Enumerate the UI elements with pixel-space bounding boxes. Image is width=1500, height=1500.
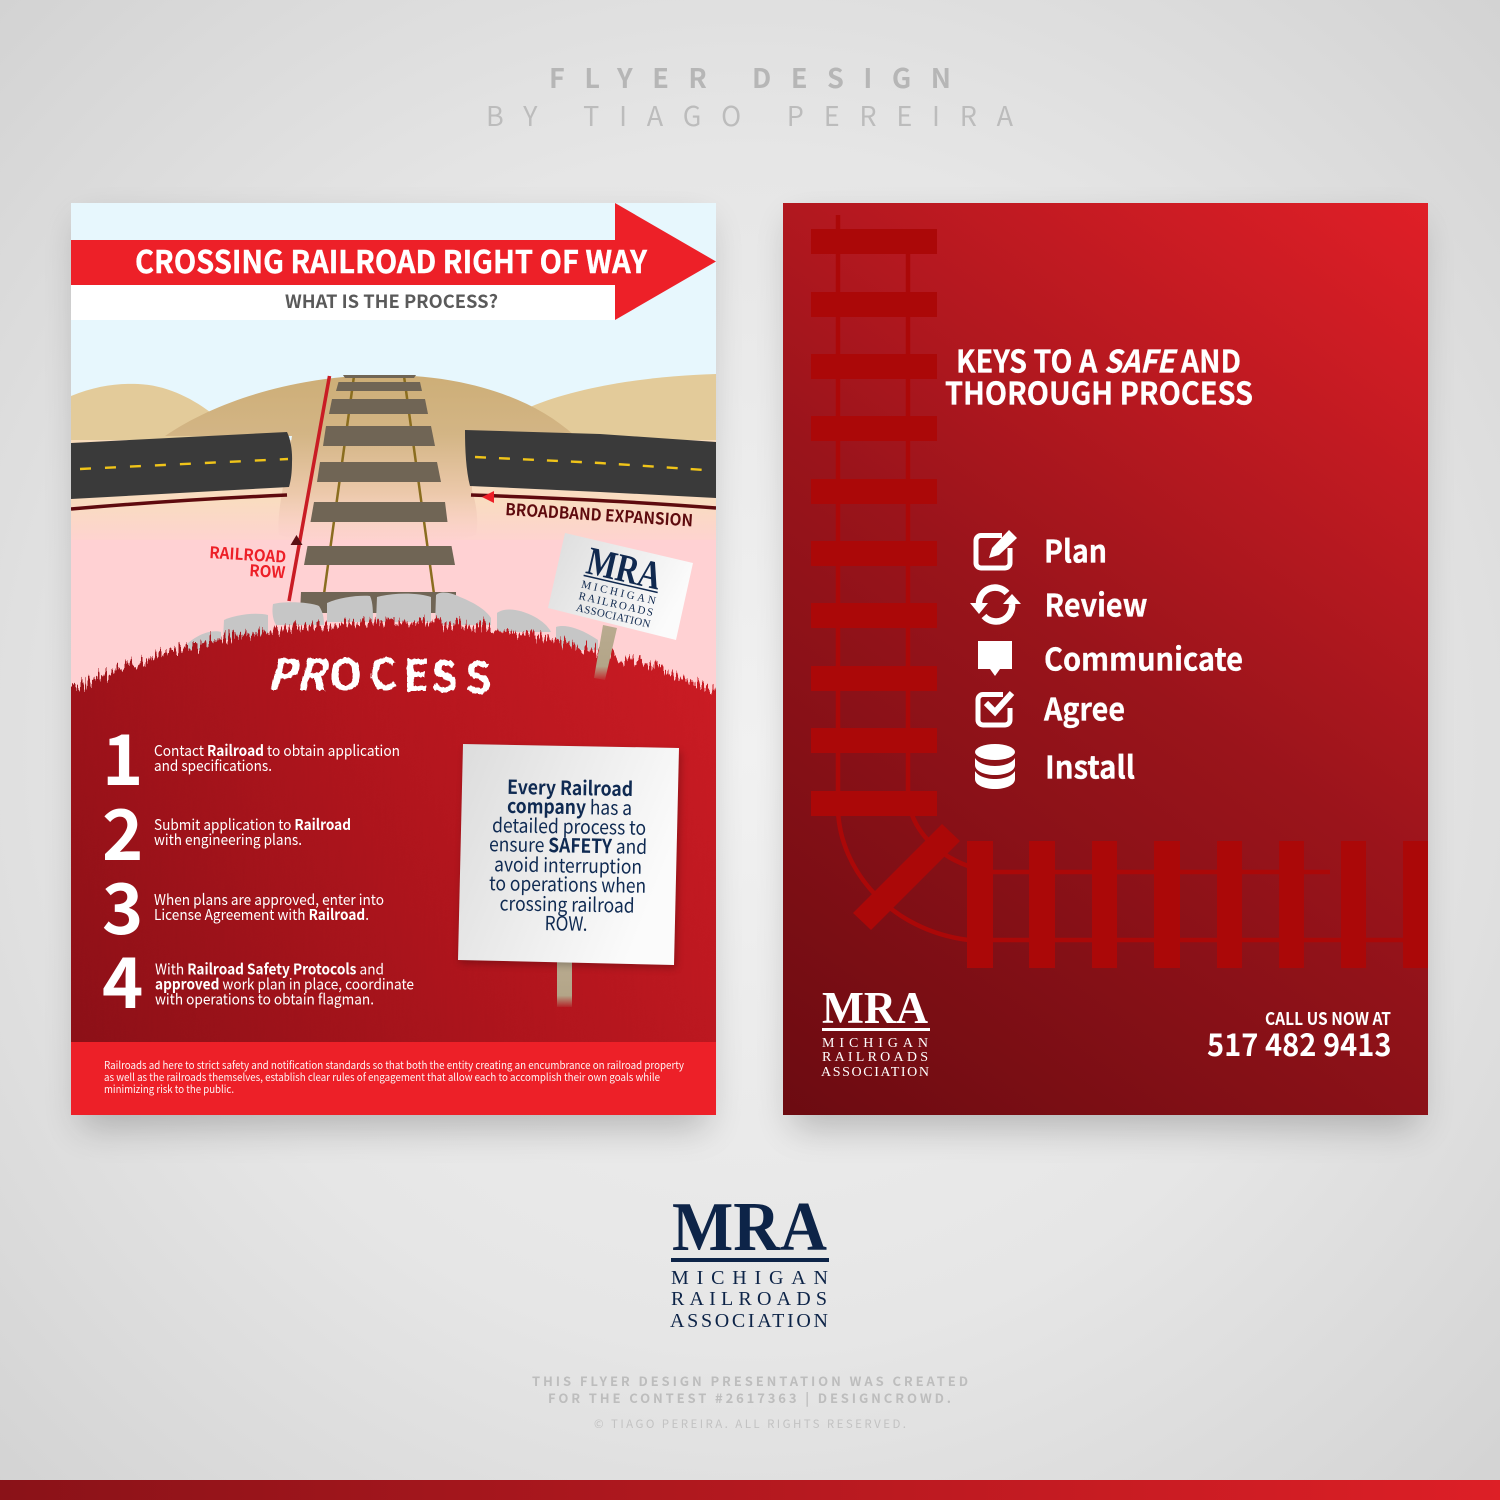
sky (71, 203, 716, 440)
step 1 (108, 734, 399, 785)
list item: agree: Agree (1043, 684, 1125, 730)
grassy red hill (71, 614, 716, 1042)
step 4 (103, 958, 414, 1008)
heading: process: S (465, 644, 492, 706)
step 3: 3 (102, 854, 143, 955)
sign text: ROW. (544, 907, 588, 937)
sign logo: RAILROADS (577, 590, 654, 619)
call to action: 517 482 9413 (1207, 1020, 1392, 1065)
list item: install (975, 742, 1135, 789)
footer strip with disclaimer: Railroads ad here to strict safety and notification standards so that both the entity creating an encumbrance on railroad property (104, 1058, 684, 1073)
list item: review: Review (1044, 580, 1148, 626)
step 3: License Agreement with Railroad. (154, 904, 369, 925)
heading: process: S (431, 643, 458, 705)
label: broadband expansion: BROADBAND EXPANSION (505, 496, 694, 531)
logo: MRA white: MICHIGAN (822, 1036, 928, 1051)
footer credit text: THIS FLYER DESIGN PRESENTATION WAS CREATED (532, 1371, 968, 1390)
middle hill and track bed (166, 376, 572, 515)
sign: MRA roadside (548, 533, 693, 680)
heading: flyer design by Tiago Pereira (486, 57, 1014, 134)
railway track (300, 375, 456, 613)
sign text: avoid interruption (494, 848, 642, 880)
sign text: Every Railroad (507, 771, 633, 802)
sign post (594, 625, 617, 680)
step 4: with operations to obtain flagman. (155, 988, 374, 1010)
sign logo (576, 548, 658, 628)
sign post (557, 961, 572, 1007)
step 4: approved work plan in place, coordinate (155, 974, 414, 994)
title: CROSSING RAILROAD RIGHT OF WAY (135, 237, 648, 282)
footer credit text: FOR THE CONTEST #2617363 | DESIGNCROWD. (548, 1388, 951, 1407)
red arrow (71, 203, 716, 320)
icon: pencil and square (976, 530, 1017, 568)
icon: refresh arrows (970, 588, 1021, 621)
arrow: railroad row (290, 535, 302, 545)
heading: process: C (369, 641, 397, 703)
panel: left flyer (40, 203, 750, 1115)
back hills (71, 374, 716, 440)
footer strip with disclaimer: minimizing risk to the public. (104, 1082, 234, 1097)
sign board (548, 533, 693, 640)
heading: process: O (329, 641, 362, 703)
step 2: Submit application to Railroad (154, 814, 351, 835)
heading: flyer design by Tiago Pereira: FLYER DESIGN (549, 57, 951, 96)
broadband lines (71, 495, 716, 509)
subtitle band (71, 285, 615, 320)
title banner arrow (71, 203, 716, 320)
bottom bar (0, 1480, 1500, 1500)
icon: speech bubble (978, 641, 1012, 676)
heading: process: R (296, 641, 331, 703)
icon: database (975, 744, 1015, 789)
list item: plan: Plan (1044, 526, 1107, 572)
logo: Michigan Railroads Association: MRA (672, 1189, 827, 1266)
step 4: With Railroad Safety Protocols and (155, 958, 384, 980)
heading: process (270, 656, 490, 695)
step 1: Contact Railroad to obtain application (154, 740, 400, 761)
heading: process: E (403, 642, 429, 704)
sign text: detailed process to (492, 809, 646, 841)
step 2: with engineering plans. (154, 829, 302, 850)
arrow: broadband (482, 491, 494, 503)
flyer shadows (80, 222, 1419, 1128)
right road (465, 430, 716, 498)
label: railroad row: RAILROAD (209, 539, 287, 568)
step 1: and specifications. (154, 755, 272, 776)
heading: keys to a safe and thorough process: THOROUGH PROCESS (945, 368, 1253, 414)
list item: install: Install (1045, 742, 1135, 788)
heading: process: P (267, 641, 302, 703)
heading: flyer design by Tiago Pereira: BY TIAGO PEREIRA (486, 95, 1014, 134)
sign logo: ASSOCIATION (575, 602, 652, 631)
left road (71, 432, 292, 499)
sign text: ensure SAFETY and (489, 828, 647, 860)
flyer background (783, 203, 1428, 1115)
label: railroad row (210, 546, 286, 578)
heading: keys to a safe and thorough process (945, 336, 1253, 414)
sign: every railroad (458, 744, 681, 1007)
logo: MRA white (821, 983, 930, 1080)
call to action: CALL US NOW AT (1265, 1006, 1391, 1031)
sign logo: MICHIGAN (580, 579, 657, 607)
list item: review (970, 580, 1148, 626)
logo: Michigan Railroads Association: MICHIGAN (671, 1267, 828, 1289)
step 2: 2 (102, 780, 143, 881)
footer credit text (532, 1371, 968, 1432)
logo: Michigan Railroads Association (670, 1189, 829, 1332)
sign shadow (460, 748, 681, 968)
logo: MRA white: ASSOCIATION (821, 1065, 929, 1080)
sign logo: MRA (583, 538, 666, 598)
stones (186, 593, 598, 650)
sign text: crossing railroad (499, 887, 635, 919)
step 2 (104, 808, 350, 860)
step 1: 1 (102, 705, 143, 806)
logo: MRA white: RAILROADS (822, 1050, 928, 1065)
footer strip with disclaimer: as well as the railroads themselves, establish clear rules of engagement that allow each to accomplish their own goals while (104, 1070, 660, 1085)
list item: communicate: Communicate (1044, 634, 1243, 680)
panel: right flyer (783, 203, 1428, 1115)
footer strip with disclaimer (71, 1042, 716, 1115)
icon: checkbox (978, 693, 1012, 725)
sign board (458, 744, 679, 965)
sign text: to operations when (489, 867, 646, 899)
footer credit text: © TIAGO PEREIRA. ALL RIGHTS RESERVED. (594, 1416, 906, 1432)
step 3: When plans are approved, enter into (154, 889, 384, 910)
subtitle: WHAT IS THE PROCESS? (285, 288, 498, 314)
sign text (489, 771, 647, 937)
background railway track (811, 215, 1428, 968)
step 4: 4 (102, 928, 143, 1029)
railroad right of way line (289, 376, 330, 601)
list item: agree (978, 684, 1125, 730)
ground (71, 440, 716, 700)
logo: Michigan Railroads Association: RAILROADS (671, 1288, 827, 1310)
sign text: company has a (507, 790, 632, 821)
logo: MRA white: MRA (822, 983, 928, 1033)
heading: keys to a safe and thorough process: KEYS TO A SAFE AND (956, 336, 1241, 382)
step 3 (104, 882, 384, 935)
label: railroad row: ROW (249, 557, 286, 583)
logo: Michigan Railroads Association: ASSOCIATION (670, 1310, 828, 1332)
list item: plan (976, 526, 1107, 572)
